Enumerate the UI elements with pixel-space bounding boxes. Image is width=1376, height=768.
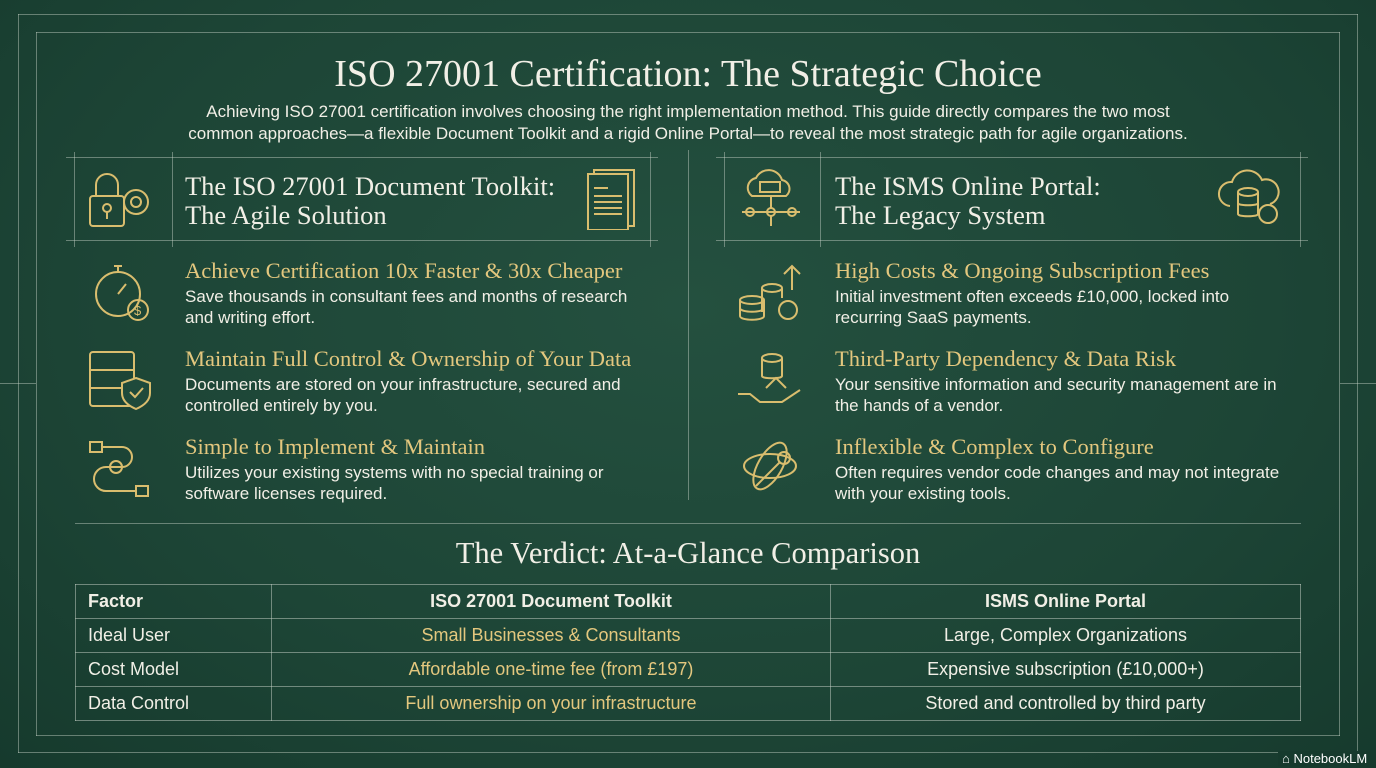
comparison table: Large, Complex Organizations [944, 625, 1187, 645]
icon: documents [587, 169, 635, 230]
comparison table [75, 584, 1301, 721]
comparison table: Small Businesses & Consultants [421, 625, 681, 645]
comparison table: Expensive subscription (£10,000+) [927, 659, 1204, 679]
panel: portal: Your sensitive information and security management are in the hands of a vendor. [835, 375, 1277, 415]
subtitle: Achieving ISO 27001 certification involves choosing the right implementation method. This guide directly compares the two most common approaches—a flexible Document Toolkit and a rigid Online Portal—to reveal the most strategic path for agile organizations. [188, 102, 1188, 143]
icon: stopwatch: $ [134, 303, 142, 318]
heading [185, 171, 555, 230]
panel: portal: Initial investment often exceeds £10,000, locked into recurring SaaS payments. [835, 287, 1229, 327]
panel: toolkit: Save thousands in consultant fees and months of research and writing effort. [185, 287, 627, 327]
heading [835, 171, 1101, 230]
heading: The ISO 27001 Document Toolkit: [185, 171, 555, 201]
comparison table: Full ownership on your infrastructure [405, 693, 697, 713]
icon: stopwatch [95, 265, 149, 321]
icon: cloud network [742, 169, 800, 226]
comparison table: Data Control [88, 693, 189, 713]
item 1: Achieve Certification 10x Faster & 30x Cheaper [185, 258, 622, 283]
panel: toolkit: Documents are stored on your infrastructure, secured and controlled entirely by you. [185, 375, 621, 415]
comparison table: ISMS Online Portal [985, 591, 1146, 611]
comparison table: Cost Model [88, 659, 179, 679]
comparison table: Factor [88, 591, 143, 611]
title: ISO 27001 Certification: The Strategic Choice [334, 53, 1042, 95]
item 3: Inflexible & Complex to Configure [835, 434, 1154, 459]
icon: lock gear [89, 173, 149, 227]
item 3: Simple to Implement & Maintain [185, 434, 485, 459]
comparison table: ISO 27001 Document Toolkit [430, 591, 672, 611]
verdict heading: The Verdict: At-a-Glance Comparison [456, 536, 920, 570]
icon: cloud database [1218, 170, 1280, 224]
comparison table: Ideal User [88, 625, 170, 645]
panel: toolkit [66, 152, 658, 503]
watermark: ⌂ NotebookLM [1282, 751, 1367, 766]
icon: coins [739, 264, 801, 321]
comparison table: Stored and controlled by third party [925, 693, 1206, 713]
heading: The Agile Solution [185, 200, 387, 230]
heading: The Legacy System [835, 200, 1045, 230]
icon: server shield [89, 351, 151, 410]
icon: tangled wrench [743, 442, 797, 490]
item 1: High Costs & Ongoing Subscription Fees [835, 258, 1209, 283]
item 2: Maintain Full Control & Ownership of Your Data [185, 346, 631, 371]
item 2: Third-Party Dependency & Data Risk [835, 346, 1176, 371]
panel: portal: Often requires vendor code changes and may not integrate with your existing tools. [835, 463, 1279, 503]
icon: cable gear [89, 441, 149, 497]
icon: hand database [738, 353, 800, 403]
panel: portal [716, 152, 1308, 503]
comparison table: Affordable one-time fee (from £197) [409, 659, 693, 679]
panel: toolkit: Utilizes your existing systems with no special training or software licenses required. [185, 463, 604, 503]
heading: The ISMS Online Portal: [835, 171, 1101, 201]
